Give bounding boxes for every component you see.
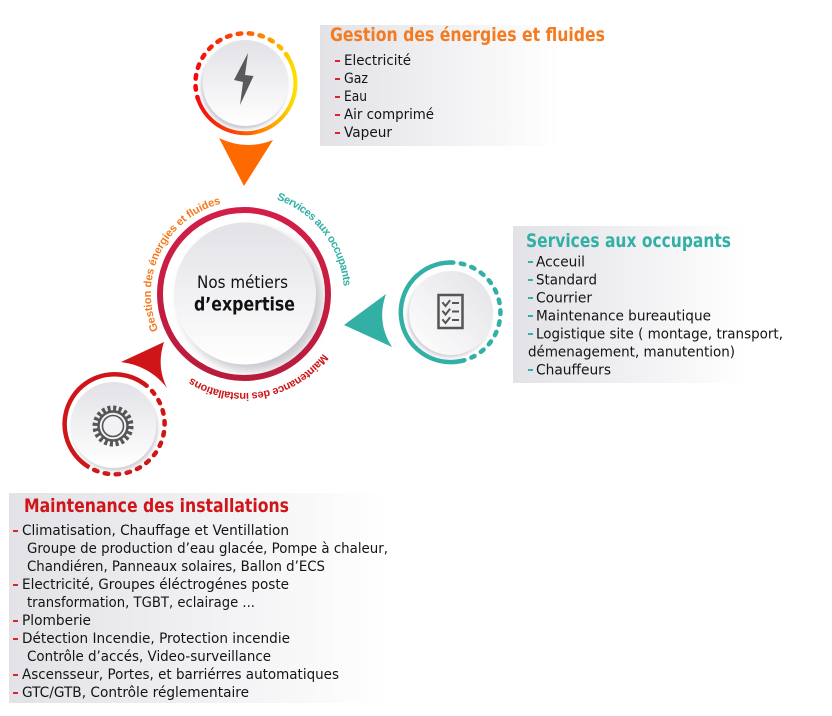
list: maintenance items: Contrôle d’accés, Video-surveillance bbox=[27, 649, 271, 665]
list: maintenance items: Chandiéren, Panneaux solaires, Ballon d’ECS bbox=[27, 559, 325, 575]
icon: lightning bolt bbox=[234, 53, 254, 105]
list: maintenance items: Ascensseur, Portes, et barriérres automatiques bbox=[22, 667, 339, 683]
list: maintenance items: Electricité, Groupes éléctrogénes poste bbox=[22, 577, 289, 593]
heading: Gestion des énergies et fluides: Gestion des énergies et fluides bbox=[330, 24, 605, 46]
list: occupant services: Logistique site ( montage, transport, bbox=[536, 326, 783, 342]
list: maintenance items: GTC/GTB, Contrôle réglementaire bbox=[22, 685, 249, 701]
badge: energy bbox=[195, 33, 295, 133]
dial: teal ring bbox=[401, 262, 500, 362]
curved label: Maintenance des installations: Maintenance des installations bbox=[189, 354, 329, 401]
list: occupant services: Chauffeurs bbox=[536, 362, 611, 378]
heading: Services aux occupants: Services aux occupants bbox=[526, 230, 731, 252]
list: energy items: Vapeur bbox=[344, 125, 392, 141]
list: maintenance items: transformation, TGBT, eclairage ... bbox=[27, 595, 255, 611]
icon: checklist bbox=[438, 295, 462, 328]
list: occupant services: Standard bbox=[536, 272, 597, 288]
list: maintenance items: Groupe de production d’eau glacée, Pompe à chaleur, bbox=[27, 541, 388, 557]
list: occupant services: démenagement, manutention) bbox=[528, 344, 735, 360]
list: occupant services: Acceuil bbox=[536, 254, 585, 270]
dial: red ring bbox=[65, 374, 165, 474]
central hub bbox=[160, 210, 328, 378]
dial: yellow to red ring bbox=[195, 33, 295, 133]
list: occupant services bbox=[528, 254, 783, 378]
list: energy items bbox=[335, 53, 434, 141]
list: occupant services: Courrier bbox=[536, 290, 592, 306]
heading: Maintenance des installations: Maintenance des installations bbox=[24, 495, 289, 517]
central title: Nos métiers bbox=[197, 273, 288, 293]
list: energy items: Eau bbox=[344, 89, 367, 105]
list: occupant services: Maintenance bureautique bbox=[536, 308, 711, 324]
list: energy items: Air comprimé bbox=[344, 107, 434, 123]
list: energy items: Electricité bbox=[344, 53, 411, 69]
arrow: red bbox=[121, 342, 167, 388]
list: energy items: Gaz bbox=[344, 71, 368, 87]
list: maintenance items: Climatisation, Chauffage et Ventillation bbox=[22, 523, 289, 539]
badge: services bbox=[401, 262, 500, 362]
list: maintenance items: Détection Incendie, Protection incendie bbox=[22, 631, 290, 647]
badge: maintenance bbox=[65, 374, 165, 474]
curved label: Services aux occupants: Services aux occupants bbox=[278, 193, 350, 286]
list: maintenance items bbox=[13, 523, 388, 701]
arrow: orange bbox=[219, 138, 273, 186]
list: maintenance items: Plomberie bbox=[22, 613, 91, 629]
panel: Maintenance des installations bbox=[9, 493, 390, 703]
curved label: Gestion des énergies et fluides: Gestion des énergies et fluides bbox=[144, 198, 220, 332]
central disc bbox=[174, 222, 316, 364]
central ring bbox=[160, 210, 328, 378]
arrow: teal bbox=[344, 294, 392, 347]
central title: d’expertise bbox=[194, 294, 295, 316]
icon: gear bbox=[96, 408, 130, 444]
central title bbox=[194, 273, 295, 316]
panel: Gestion des énergies et fluides bbox=[320, 24, 605, 146]
panel: Services aux occupants bbox=[513, 226, 783, 383]
